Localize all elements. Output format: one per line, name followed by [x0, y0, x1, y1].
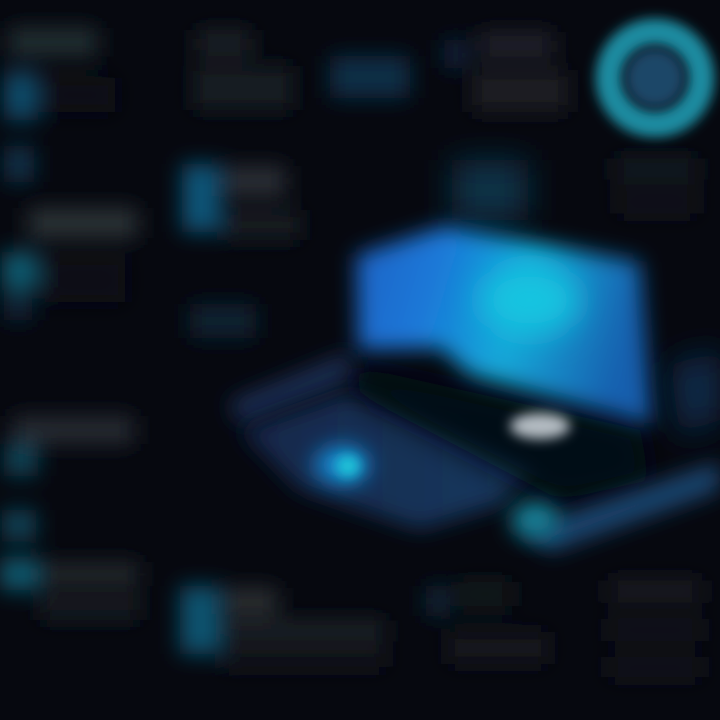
screen highlight — [480, 265, 580, 335]
right rail — [520, 462, 720, 552]
panel: bottom right text — [608, 580, 702, 678]
panel: top centre accent — [330, 56, 410, 98]
screen — [356, 226, 652, 425]
panel: top right text — [444, 32, 568, 112]
icon: top glow above device — [452, 160, 528, 220]
panel: lower left list — [0, 416, 140, 620]
white key — [510, 413, 570, 439]
teal node — [511, 501, 559, 539]
panel: centre left item — [182, 164, 300, 338]
text block: right of ring — [614, 158, 698, 214]
panel: top left list — [4, 28, 115, 182]
panel: bottom middle text — [426, 582, 548, 664]
laptop base — [240, 392, 540, 530]
right side panel — [670, 350, 720, 435]
panel: bottom centre item — [180, 586, 386, 668]
panel: middle left list — [2, 208, 138, 320]
dark hinge — [350, 365, 650, 500]
glowing dot — [314, 445, 370, 485]
panel: top centre text — [193, 30, 293, 110]
left connector bar — [228, 352, 358, 424]
icon: ring — [609, 32, 701, 124]
illustration: laptop — [228, 226, 720, 552]
